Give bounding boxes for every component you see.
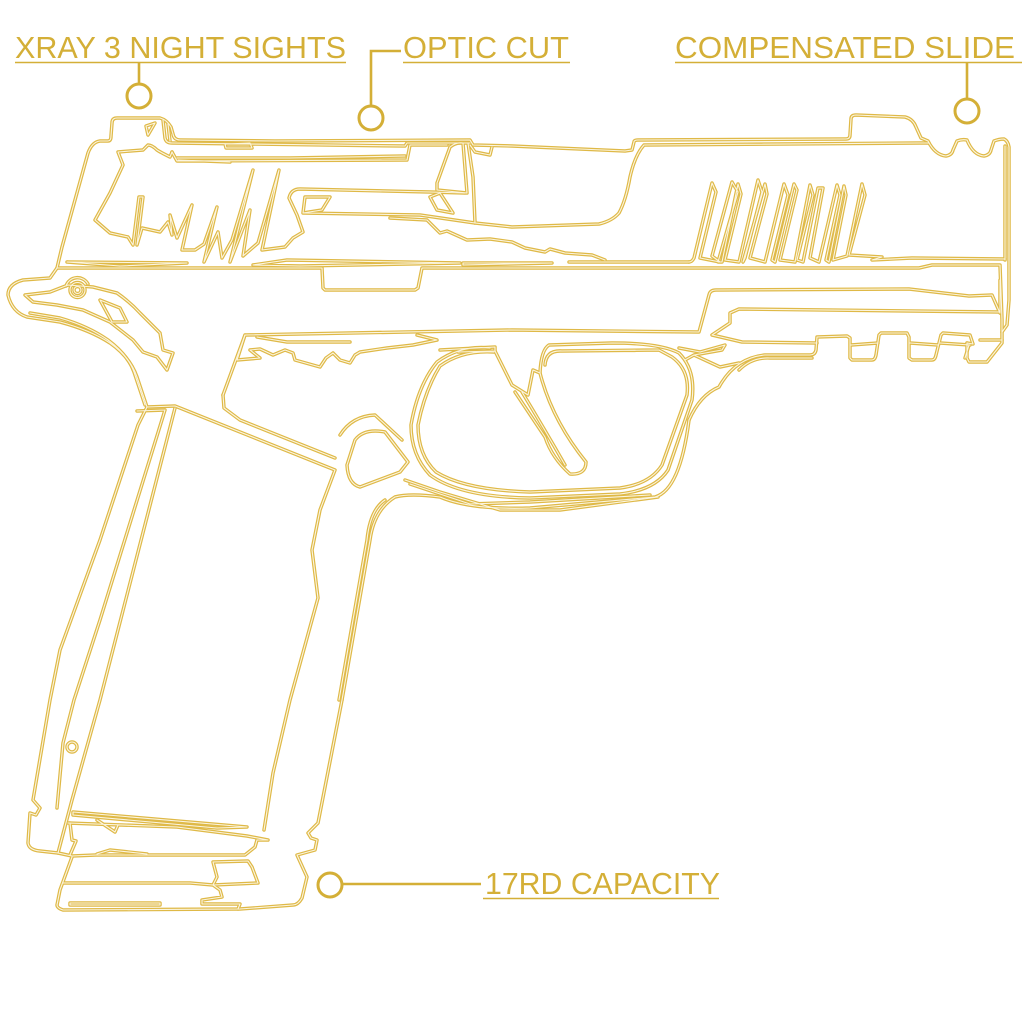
- beavertail and backstrap curve: [8, 268, 257, 856]
- white centre of double lines: [8, 115, 1009, 910]
- underline: [15, 62, 346, 64]
- label: COMPENSATED SLIDE: [675, 30, 1015, 65]
- leader and marker: [966, 63, 968, 99]
- frame top line and accessory rail: [57, 265, 1002, 362]
- slide lower rail lines: [67, 260, 689, 266]
- magazine well slot: [67, 742, 77, 752]
- underline: [675, 62, 1022, 64]
- sight and slide top details: [146, 120, 470, 148]
- front slide serrations: [689, 180, 1005, 262]
- floorplate base and magazine: [57, 700, 342, 910]
- slide rear serration area: [95, 145, 465, 262]
- trigger guard: [411, 343, 693, 498]
- underline: [483, 898, 719, 900]
- leader and marker: [371, 51, 401, 106]
- callout: optic cut: [359, 30, 570, 130]
- pivot pin: [66, 278, 88, 298]
- barrel hood jagged edge: [390, 218, 605, 260]
- guard lower lines: [405, 480, 658, 510]
- leader and marker: [343, 883, 481, 885]
- callout: 17rd capacity: [318, 866, 720, 901]
- trigger: [495, 351, 586, 474]
- label: XRAY 3 NIGHT SIGHTS: [15, 30, 346, 65]
- front strap: [339, 420, 689, 700]
- dust cover: [223, 289, 1000, 395]
- slide outline: [57, 115, 1009, 332]
- callout: compensated slide: [675, 30, 1022, 123]
- optic cut and slide step: [303, 143, 929, 227]
- safety lever: [25, 285, 173, 370]
- leader and marker: [138, 63, 140, 84]
- frame lower jagged edges: [237, 335, 739, 367]
- magazine release: [340, 415, 408, 487]
- pistol line drawing: [8, 115, 1009, 910]
- grip panel: [57, 406, 335, 853]
- slide upper groove: [172, 145, 447, 162]
- underline: [403, 62, 570, 64]
- label: 17RD CAPACITY: [485, 866, 720, 901]
- ejection port: [430, 143, 492, 223]
- trigger guard rail blocks: [689, 333, 1002, 420]
- label: OPTIC CUT: [403, 30, 569, 65]
- callout: xray 3 night sights: [15, 30, 346, 108]
